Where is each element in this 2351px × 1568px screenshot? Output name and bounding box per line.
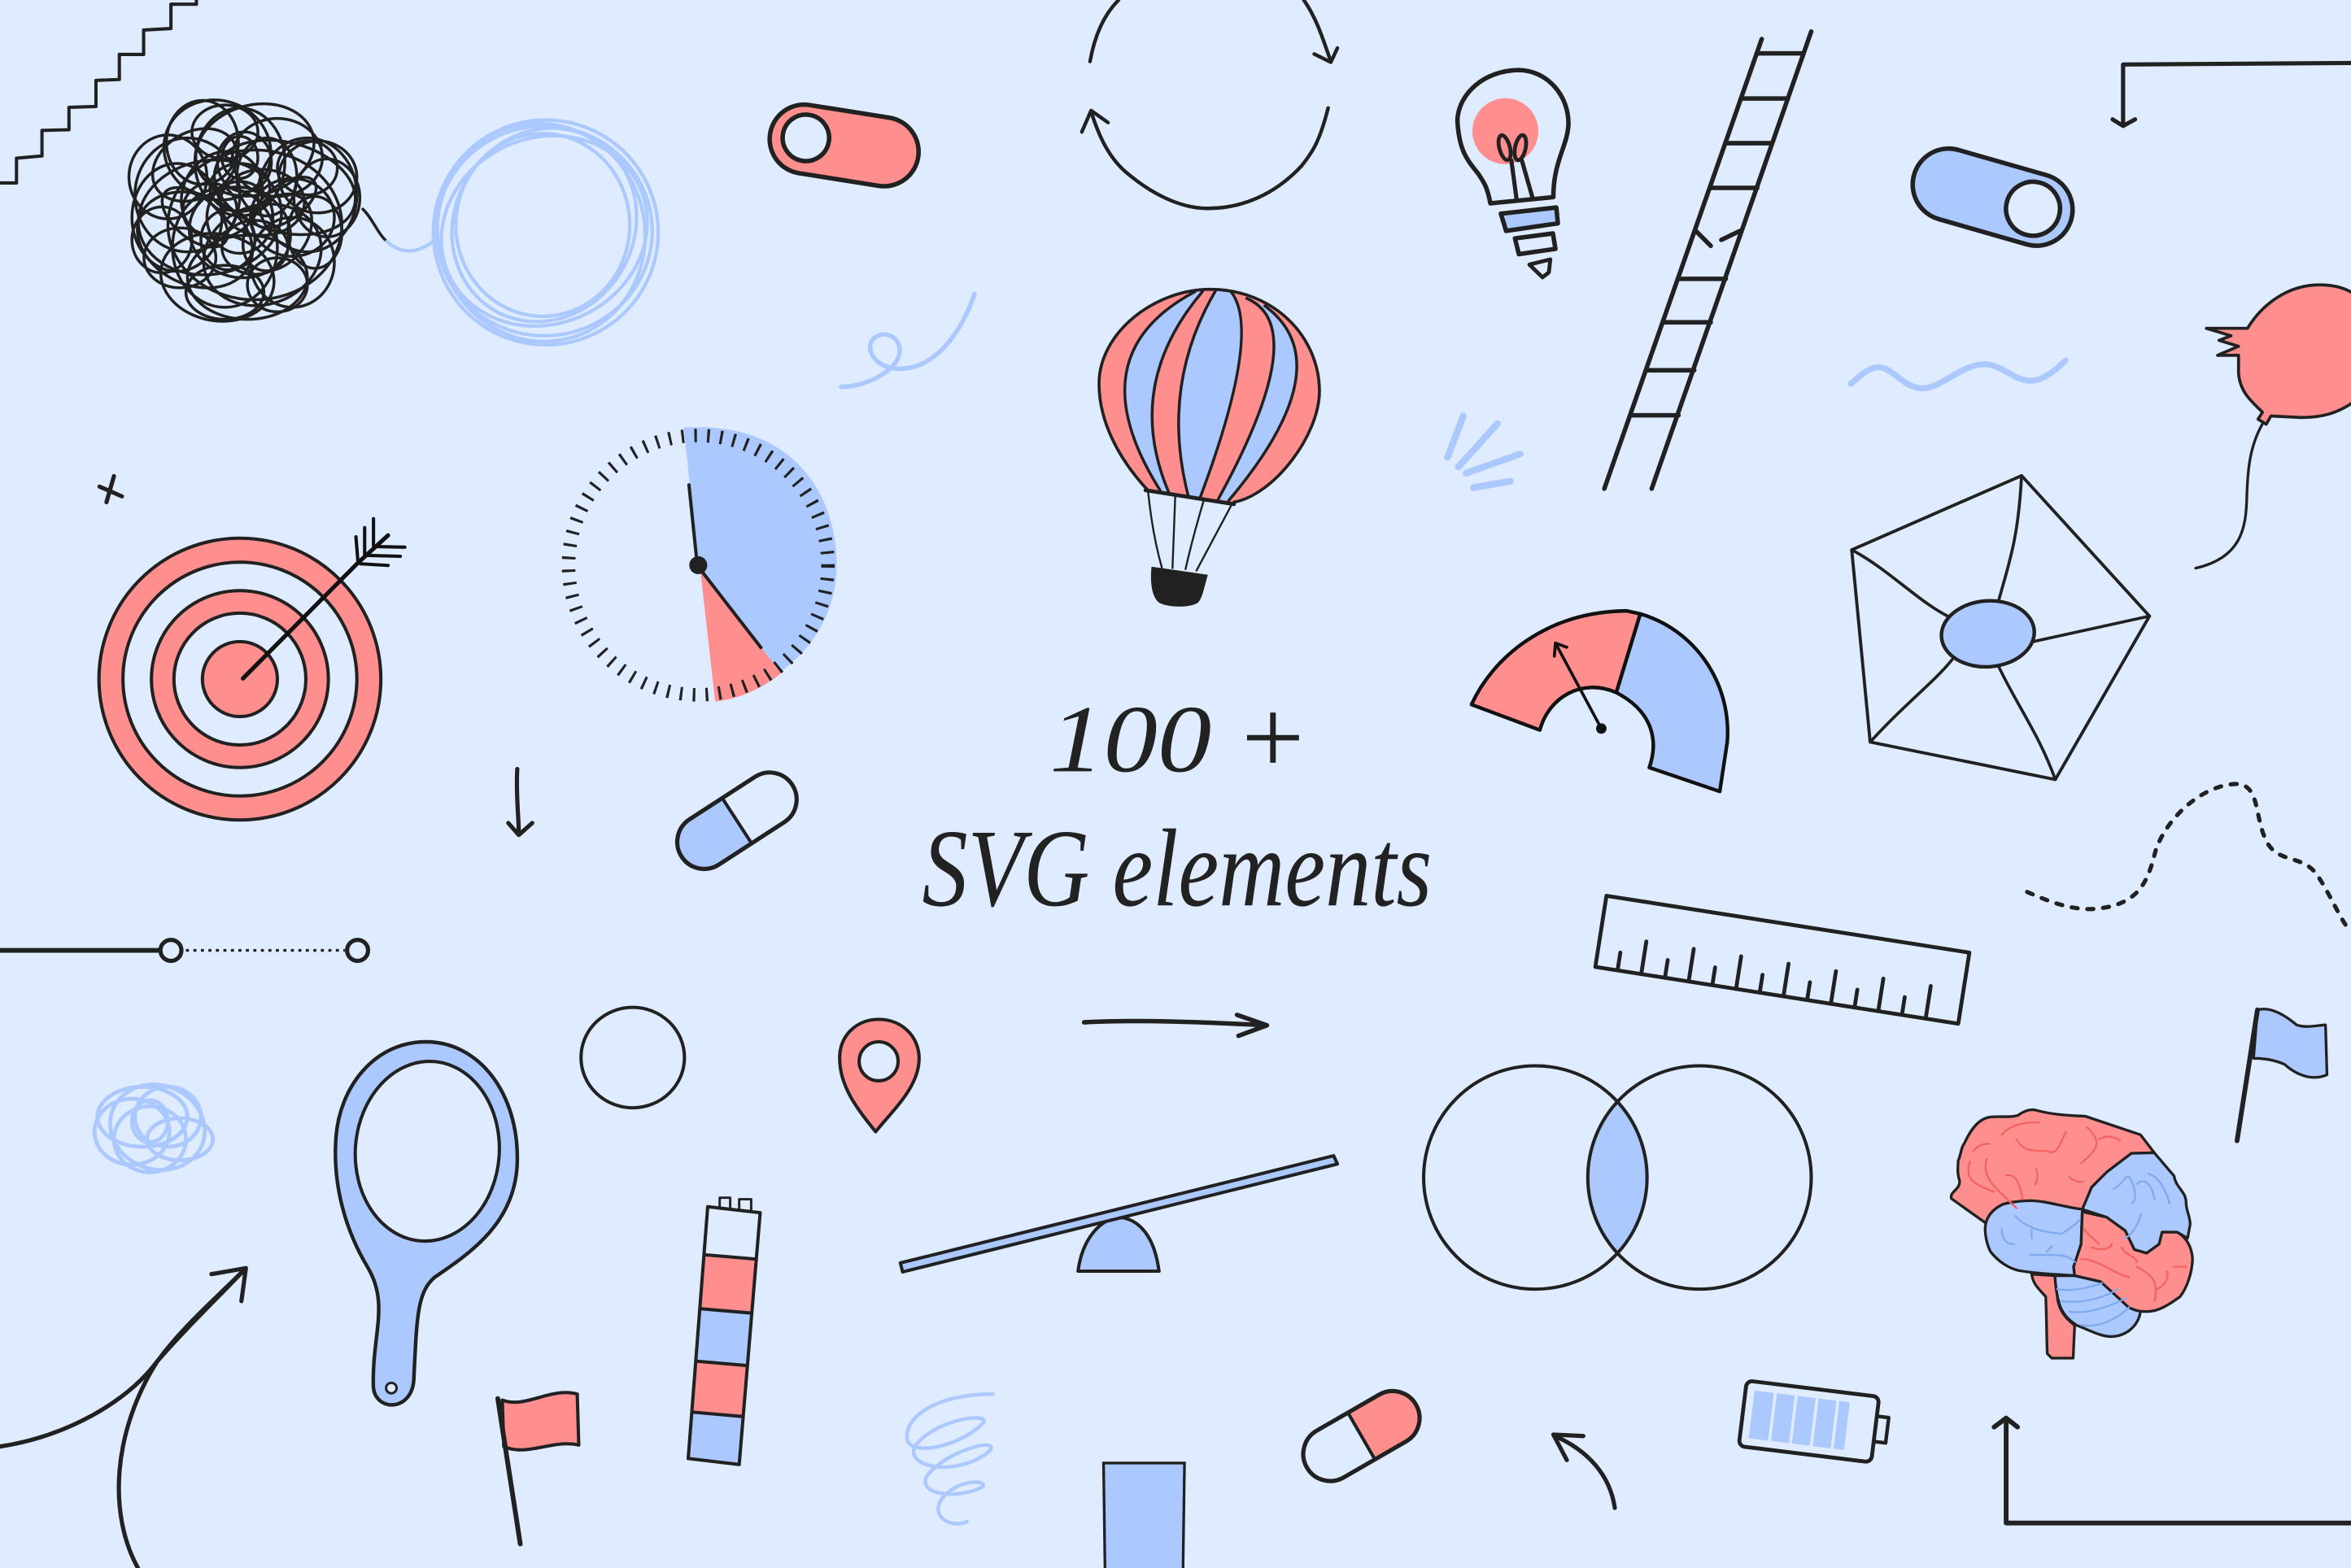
tangled black scribble xyxy=(121,85,387,330)
bottom capsule xyxy=(1293,1381,1429,1491)
blue small scribble xyxy=(94,1071,217,1183)
gauge xyxy=(1472,611,1728,791)
blue rectangle bottom xyxy=(1104,1463,1184,1568)
cycle arrows xyxy=(1082,0,1337,208)
brain: parietal lobe xyxy=(2083,1152,2190,1253)
blue loose circle scribble xyxy=(387,89,690,377)
brain: stem xyxy=(2031,1274,2074,1358)
venn diagram xyxy=(1424,1066,1811,1289)
brain: occipital lobe xyxy=(2074,1212,2192,1312)
blue curl xyxy=(841,294,975,387)
long right arrow xyxy=(1084,1015,1267,1036)
blue toggle switch xyxy=(1904,140,2081,255)
elbow arrow bottom right xyxy=(1994,1418,2351,1523)
left capsule xyxy=(667,762,807,879)
plus mark xyxy=(99,476,122,502)
blue coil scribble xyxy=(907,1394,992,1524)
brain: cerebellum xyxy=(2055,1276,2140,1336)
pink toggle switch xyxy=(765,100,923,191)
location pin xyxy=(840,1019,919,1132)
pentagon web xyxy=(1852,476,2149,779)
zigzag line xyxy=(0,0,196,183)
hot air balloon xyxy=(1099,290,1319,607)
clock dial xyxy=(569,427,836,702)
small curved arrow xyxy=(1553,1435,1615,1508)
hand mirror xyxy=(335,1042,517,1405)
ladder xyxy=(1604,32,1811,489)
title xyxy=(923,677,1432,930)
blue wave xyxy=(1851,360,2065,388)
title: + xyxy=(1241,677,1305,797)
title: SVG elements xyxy=(923,806,1432,930)
brain: veins xyxy=(1968,1122,2186,1326)
small down arrow xyxy=(508,769,532,835)
empty circle xyxy=(581,1008,684,1108)
timeline with nodes xyxy=(0,940,368,960)
pink flag xyxy=(498,1392,578,1544)
elbow arrow top right xyxy=(2113,63,2351,126)
big curved arrows bottom left xyxy=(0,1268,246,1568)
ruler xyxy=(1595,895,1969,1024)
brain xyxy=(1951,1110,2192,1358)
dashed curve xyxy=(2027,784,2351,932)
blue flag xyxy=(2237,1009,2327,1141)
blue burst lines xyxy=(1447,416,1520,488)
seesaw xyxy=(901,1156,1337,1272)
brain: frontal lobe xyxy=(1951,1110,2154,1229)
light bulb xyxy=(1458,70,1568,277)
target with arrow xyxy=(99,519,405,820)
striped tower battery xyxy=(688,1198,760,1465)
pink balloon xyxy=(2196,285,2351,568)
horizontal battery xyxy=(1738,1381,1891,1464)
brain: temporal lobe xyxy=(1985,1200,2083,1276)
title: 100 xyxy=(1049,686,1211,792)
